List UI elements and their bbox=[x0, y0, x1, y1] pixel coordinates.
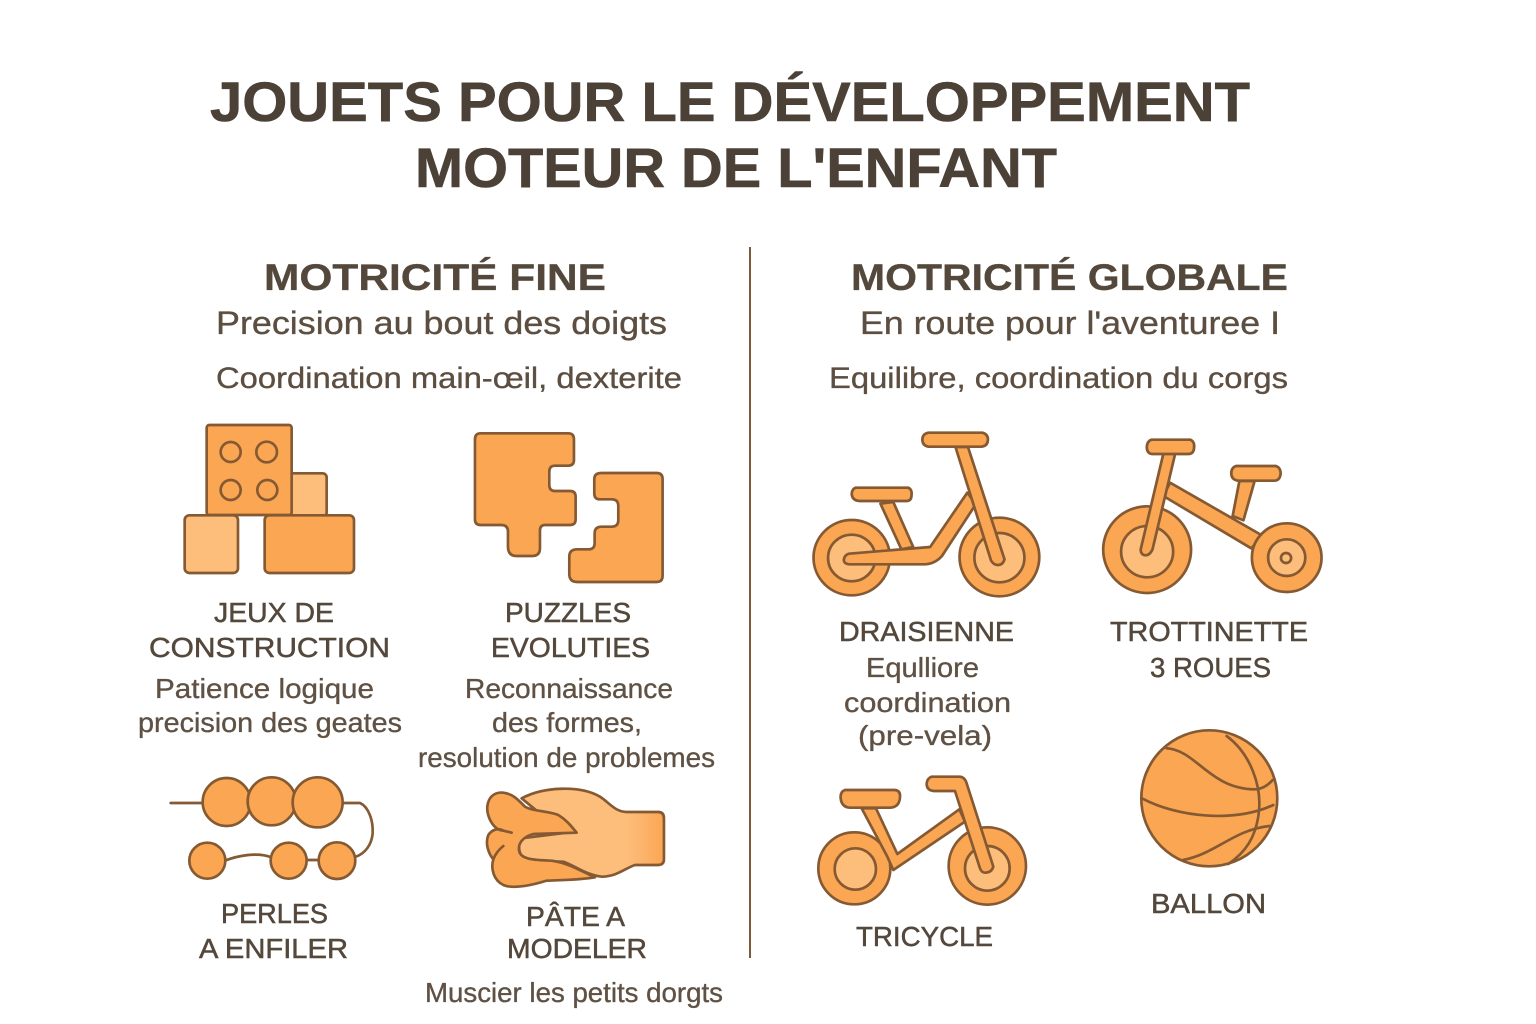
label: trottinette 3 roues: TROTTINETTE bbox=[1110, 616, 1308, 647]
description: puzzles evoluties: resolution de problemes bbox=[418, 742, 715, 773]
description: draisienne: coordination bbox=[844, 687, 1011, 718]
label: pate a modeler bbox=[507, 901, 647, 964]
label: perles a enfiler: A ENFILER bbox=[199, 933, 348, 964]
heading: motricité fine: MOTRICITÉ FINE bbox=[264, 257, 606, 298]
icon: modelling dough in hand bbox=[487, 789, 664, 887]
label: puzzles evoluties: EVOLUTIES bbox=[491, 632, 650, 663]
label: jeux de construction bbox=[149, 597, 390, 663]
label: draisienne: DRAISIENNE bbox=[839, 616, 1014, 647]
description: jeux de construction bbox=[138, 673, 402, 738]
title: MOTEUR DE L'ENFANT bbox=[415, 136, 1057, 199]
icon: scooter bbox=[1103, 440, 1322, 593]
description: motricité globale: Equilibre, coordination du corgs bbox=[829, 362, 1288, 395]
label: jeux de construction: JEUX DE bbox=[214, 597, 334, 628]
description: puzzles evoluties: Reconnaissance bbox=[465, 673, 673, 704]
title: JOUETS POUR LE DÉVELOPPEMENT bbox=[210, 70, 1250, 133]
label: puzzles evoluties bbox=[491, 597, 650, 663]
description: draisienne: Equlliore bbox=[866, 652, 979, 683]
icon: building blocks bbox=[185, 425, 354, 573]
label: trottinette 3 roues bbox=[1110, 616, 1308, 683]
label: perles a enfiler: PERLES bbox=[221, 898, 328, 929]
label: puzzles evoluties: PUZZLES bbox=[505, 597, 631, 628]
label: pate a modeler: PÂTE A bbox=[526, 901, 625, 932]
icon: puzzle pieces bbox=[475, 433, 663, 582]
subtitle: motricité globale: En route pour l'aventuree I bbox=[860, 305, 1280, 341]
description: draisienne: (pre-vela) bbox=[858, 720, 992, 751]
icon: tricycle bbox=[818, 777, 1026, 905]
heading: motricité globale: MOTRICITÉ GLOBALE bbox=[851, 257, 1288, 298]
description: jeux de construction: Patience logique bbox=[155, 673, 374, 704]
description: puzzles evoluties bbox=[418, 673, 715, 773]
panel: motricité fine bbox=[138, 257, 723, 1008]
label: tricycle: TRICYCLE bbox=[856, 921, 993, 952]
description: jeux de construction: precision des geates bbox=[138, 707, 402, 738]
description: draisienne bbox=[844, 652, 1011, 751]
label: pate a modeler: MODELER bbox=[507, 933, 647, 964]
column divider bbox=[749, 247, 751, 958]
panel: motricité globale bbox=[814, 257, 1322, 952]
title bbox=[210, 70, 1250, 199]
description: puzzles evoluties: des formes, bbox=[492, 707, 642, 738]
description: motricité fine: Coordination main-œil, dexterite bbox=[216, 362, 682, 395]
icon: balance bike bbox=[814, 433, 1039, 596]
label: jeux de construction: CONSTRUCTION bbox=[149, 632, 390, 663]
subtitle: motricité fine: Precision au bout des doigts bbox=[216, 305, 667, 341]
icon: ball bbox=[1141, 730, 1277, 866]
label: trottinette 3 roues: 3 ROUES bbox=[1150, 652, 1271, 683]
icon: beads on a string bbox=[171, 777, 373, 879]
label: ballon: BALLON bbox=[1151, 888, 1266, 919]
label: perles a enfiler bbox=[199, 898, 348, 964]
description: pate a modeler: Muscier les petits dorgts bbox=[425, 977, 723, 1008]
